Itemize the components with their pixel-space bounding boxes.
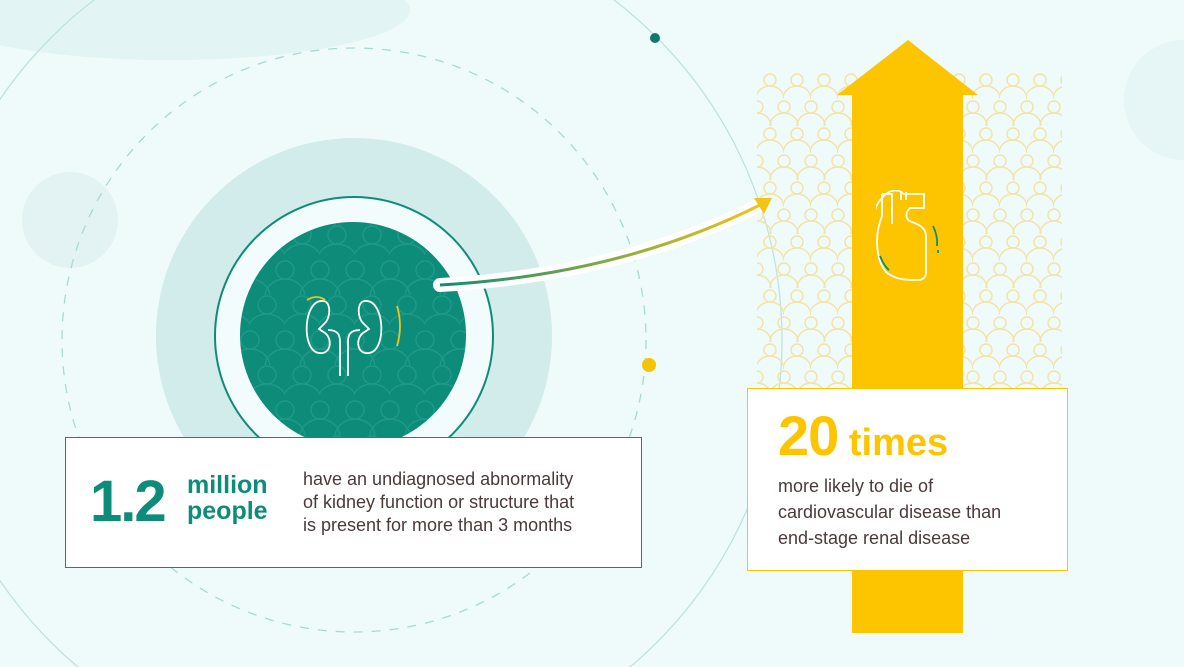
description bbox=[303, 469, 574, 535]
description: have an undiagnosed abnormality bbox=[303, 469, 573, 489]
panel: kidney stat bbox=[65, 437, 642, 568]
description bbox=[778, 476, 1001, 548]
description: of kidney function or structure that bbox=[303, 492, 574, 512]
icon: heart bbox=[876, 190, 939, 281]
stat heading: 20 times bbox=[778, 404, 948, 467]
stat number: 1.2 bbox=[90, 469, 165, 534]
stat unit bbox=[187, 471, 268, 525]
description: is present for more than 3 months bbox=[303, 515, 572, 535]
stat unit: people bbox=[187, 497, 268, 525]
icon: kidneys bbox=[306, 296, 401, 376]
description: more likely to die of bbox=[778, 476, 933, 496]
panel: cardiovascular stat bbox=[747, 388, 1068, 571]
description: cardiovascular disease than bbox=[778, 502, 1001, 522]
description: end-stage renal disease bbox=[778, 528, 970, 548]
big yellow arrow bbox=[837, 40, 978, 633]
stat unit: million bbox=[187, 471, 268, 499]
